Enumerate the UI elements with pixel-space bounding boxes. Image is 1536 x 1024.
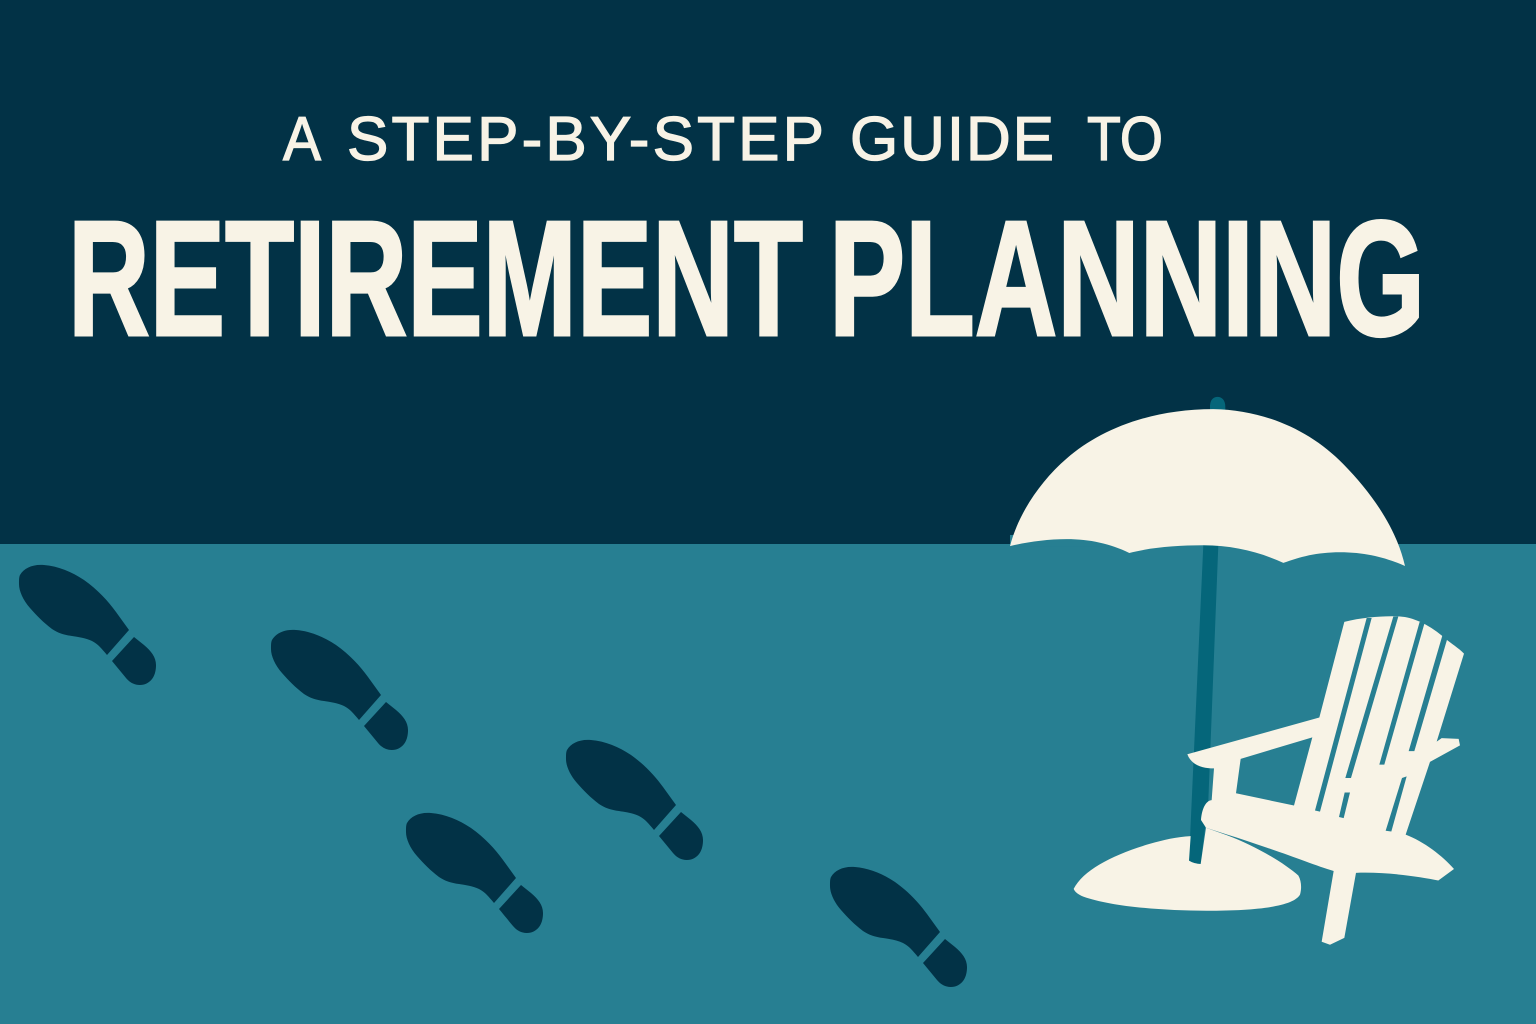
chair slat gaps — [1315, 616, 1447, 832]
teal patch under canopy hem — [1010, 535, 1130, 546]
icon: sand mound — [1074, 828, 1301, 911]
heading: main title: RETIREMENT — [68, 187, 803, 370]
icon: footprint 2 — [271, 630, 408, 750]
heading: subtitle: TO — [1087, 105, 1163, 174]
heading: subtitle: GUIDE — [850, 105, 1054, 174]
background: night sky band — [0, 0, 1536, 544]
illustration: beach umbrella and chair — [1010, 397, 1464, 945]
heading: subtitle: STEP-BY-STEP — [347, 105, 824, 174]
heading: subtitle: A — [283, 105, 322, 174]
icon: footprint 5 — [830, 867, 967, 987]
icon: footprint 4 — [406, 813, 543, 933]
icon: footprint 3 — [566, 740, 703, 860]
icon: umbrella pole — [1189, 397, 1225, 864]
heading: subtitle — [283, 105, 1163, 174]
icon: adirondack chair — [1187, 616, 1464, 945]
icon: footprint 1 — [19, 565, 156, 685]
background: teal ground band — [0, 544, 1536, 1024]
icon: umbrella canopy — [1010, 409, 1405, 566]
